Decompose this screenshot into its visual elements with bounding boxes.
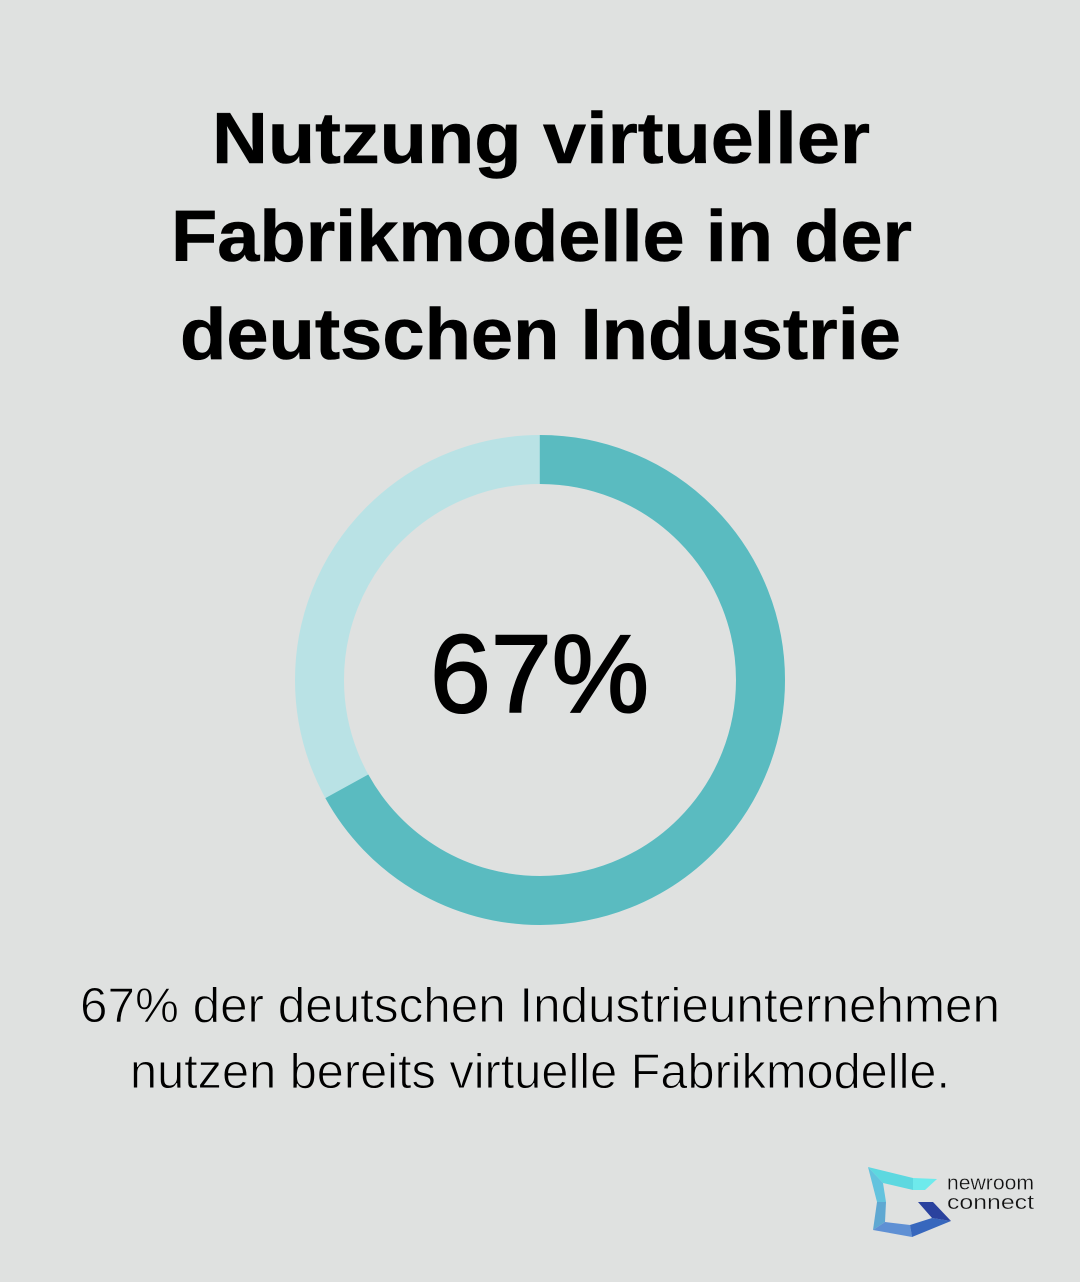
donut chart xyxy=(320,460,760,900)
logo wordmark xyxy=(947,1172,1035,1214)
donut segment: 67% xyxy=(320,460,760,900)
logo mark xyxy=(868,1167,951,1237)
title: Fabrikmodelle in der xyxy=(171,197,912,277)
logo wordmark: connect xyxy=(947,1192,1035,1214)
description text xyxy=(80,979,1000,1099)
title: deutschen Industrie xyxy=(180,295,901,375)
title: Nutzung virtueller xyxy=(212,99,870,179)
description text: 67% der deutschen Industrieunternehmen xyxy=(80,979,1000,1033)
center value: 67% xyxy=(430,613,649,736)
logo wordmark: newroom xyxy=(947,1172,1034,1194)
title xyxy=(171,99,912,375)
description text: nutzen bereits virtuelle Fabrikmodelle. xyxy=(130,1045,950,1099)
logo: newroom connect xyxy=(868,1167,1035,1237)
